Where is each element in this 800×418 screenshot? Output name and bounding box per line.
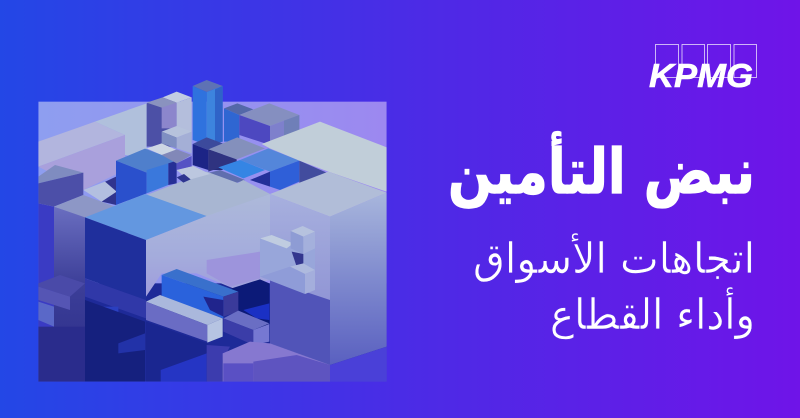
reflections	[104, 306, 118, 312]
middle top	[147, 172, 243, 217]
floor	[38, 283, 387, 382]
tall back cluster	[147, 97, 177, 147]
back blue box	[224, 103, 253, 115]
top-left block	[38, 122, 125, 167]
subtitle line 2: وأداء القطاع	[550, 287, 755, 339]
left small block	[38, 165, 83, 183]
blue top slab	[85, 194, 207, 240]
logo boxes	[656, 44, 756, 78]
large right top	[262, 122, 387, 192]
back grey box	[239, 103, 299, 126]
centre grey-blue slab	[208, 137, 265, 159]
notch blocks	[260, 235, 315, 277]
big central wall	[146, 194, 270, 297]
tall blue tower	[193, 80, 223, 92]
blue cube	[116, 149, 177, 173]
dark gap	[102, 177, 116, 205]
bright blue pieces	[240, 148, 299, 172]
dark opening	[232, 279, 269, 333]
logo: KPMG	[649, 44, 756, 95]
logo wordmark: KPMG	[649, 58, 753, 95]
illustration: isometric cubes	[38, 80, 387, 382]
small light cube left	[83, 182, 117, 202]
hole	[299, 160, 326, 183]
right outer wall	[330, 193, 387, 365]
sky	[38, 102, 387, 382]
subtitle line 1: اتجاهات الأسواق	[473, 232, 755, 283]
big blue left face	[85, 217, 146, 284]
dark cube centre	[193, 137, 223, 150]
right inner wall	[270, 194, 330, 365]
light bar	[146, 295, 223, 325]
blue bar	[162, 269, 238, 297]
small bar	[223, 311, 269, 330]
